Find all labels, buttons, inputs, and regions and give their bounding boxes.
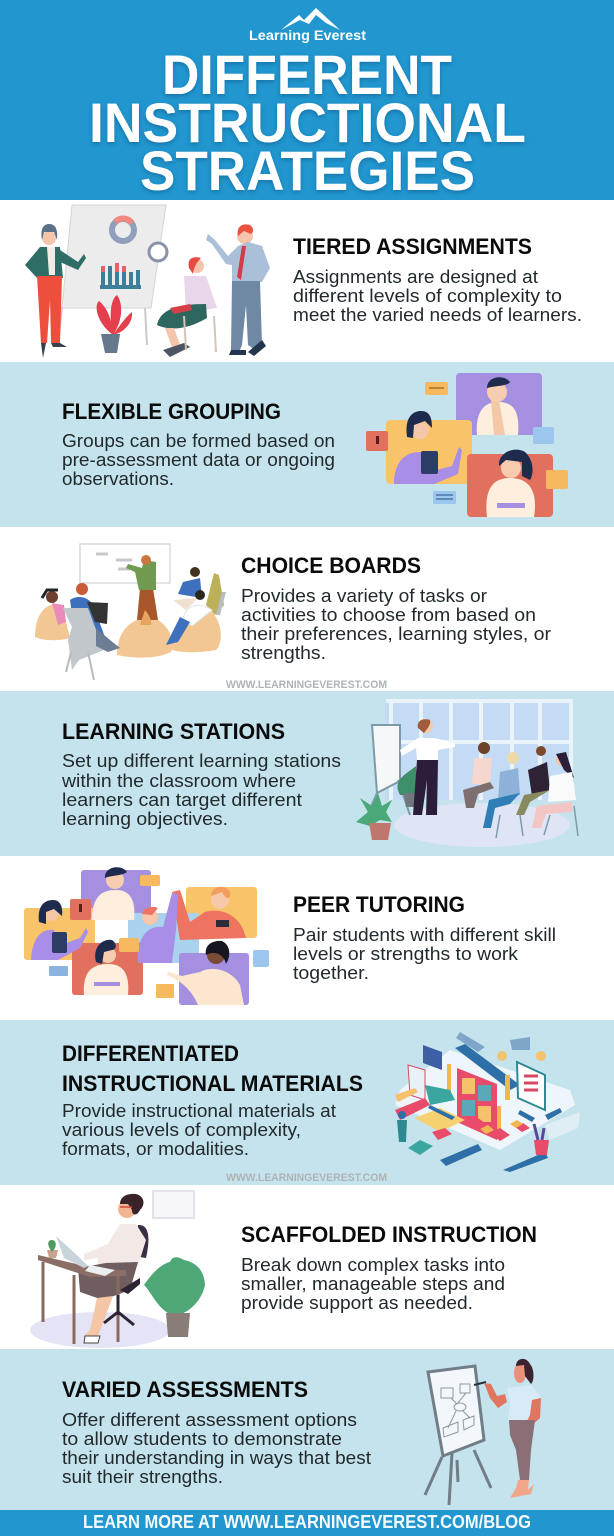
body text: different levels of complexity to xyxy=(293,286,562,306)
header band xyxy=(0,0,614,202)
body text: observations. xyxy=(62,469,174,489)
heading: FLEXIBLE GROUPING xyxy=(62,399,281,424)
illustration: class at the window xyxy=(356,700,578,847)
panel: choice boards xyxy=(0,527,614,691)
illustration: woman at a desk xyxy=(30,1191,205,1348)
body text xyxy=(61,751,341,829)
panel: scaffolded instruction xyxy=(0,1185,614,1349)
body text xyxy=(62,1410,371,1487)
heading xyxy=(62,1041,363,1096)
illustration: online collaboration windows xyxy=(24,867,269,1005)
panel: varied assessments xyxy=(0,1349,614,1510)
heading: DIFFERENTIATED xyxy=(62,1041,239,1066)
body text: learning objectives. xyxy=(62,809,228,829)
body text: together. xyxy=(293,963,369,983)
body text: Offer different assessment options xyxy=(62,1410,357,1430)
watermark: WWW.LEARNINGEVEREST.COM xyxy=(226,679,387,691)
heading: INSTRUCTIONAL MATERIALS xyxy=(62,1071,363,1096)
body text: meet the varied needs of learners. xyxy=(293,305,582,325)
body text: suit their strengths. xyxy=(62,1467,223,1487)
heading: VARIED ASSESSMENTS xyxy=(62,1377,308,1402)
body text: their preferences, learning styles, or xyxy=(241,624,551,644)
body text: Provide instructional materials at xyxy=(62,1101,336,1121)
body text xyxy=(293,267,582,325)
panel: flexible grouping xyxy=(0,362,614,527)
body text xyxy=(62,1101,336,1159)
body text: provide support as needed. xyxy=(241,1293,473,1313)
title: DIFFERENT xyxy=(162,43,452,106)
illustration: video call windows xyxy=(366,373,568,517)
footer band xyxy=(0,1510,614,1536)
watermark: WWW.LEARNINGEVEREST.COM xyxy=(226,1172,387,1184)
body text: various levels of complexity, xyxy=(62,1120,301,1140)
heading: SCAFFOLDED INSTRUCTION xyxy=(241,1222,537,1247)
body text xyxy=(241,586,551,663)
body text: Set up different learning stations xyxy=(62,751,341,771)
logo: Learning Everest xyxy=(249,8,367,43)
body text xyxy=(241,1255,505,1313)
panel: learning stations xyxy=(0,691,614,856)
title: STRATEGIES xyxy=(140,139,475,202)
body text: Pair students with different skill xyxy=(293,925,556,945)
body text: Break down complex tasks into xyxy=(241,1255,505,1275)
heading: CHOICE BOARDS xyxy=(241,553,421,578)
heading: TIERED ASSIGNMENTS xyxy=(293,234,532,259)
body text: Assignments are designed at xyxy=(293,267,538,287)
logo: Learning Everest: Learning Everest xyxy=(249,28,367,43)
body text: their understanding in ways that best xyxy=(62,1448,371,1468)
body text: formats, or modalities. xyxy=(62,1139,249,1159)
body text: Provides a variety of tasks or xyxy=(241,586,487,606)
illustration: group around a presenter xyxy=(35,544,226,680)
illustration: isometric workspace xyxy=(395,1032,580,1172)
body text: activities to choose from based on xyxy=(241,605,536,625)
panel: differentiated instructional materials xyxy=(0,1020,614,1185)
body text xyxy=(293,925,556,983)
body text: strengths. xyxy=(241,643,326,663)
body text: learners can target different xyxy=(62,790,302,810)
illustration: presentation at flip board xyxy=(25,205,270,358)
body text: levels or strengths to work xyxy=(293,944,519,964)
title: INSTRUCTIONAL xyxy=(89,91,526,154)
body text: Groups can be formed based on xyxy=(62,431,335,451)
body text: smaller, manageable steps and xyxy=(241,1274,505,1294)
footer link text: LEARN MORE AT WWW.LEARNINGEVEREST.COM/BLOG xyxy=(83,1512,531,1532)
panel: peer tutoring xyxy=(0,856,614,1020)
heading: PEER TUTORING xyxy=(293,892,465,917)
body text: within the classroom where xyxy=(61,771,296,791)
heading: LEARNING STATIONS xyxy=(62,719,285,744)
body text: pre-assessment data or ongoing xyxy=(62,450,335,470)
title xyxy=(89,43,526,202)
illustration: woman drawing on flip chart xyxy=(425,1359,541,1505)
body text: to allow students to demonstrate xyxy=(62,1429,342,1449)
body text xyxy=(62,431,335,489)
panel: tiered assignments xyxy=(0,200,614,362)
